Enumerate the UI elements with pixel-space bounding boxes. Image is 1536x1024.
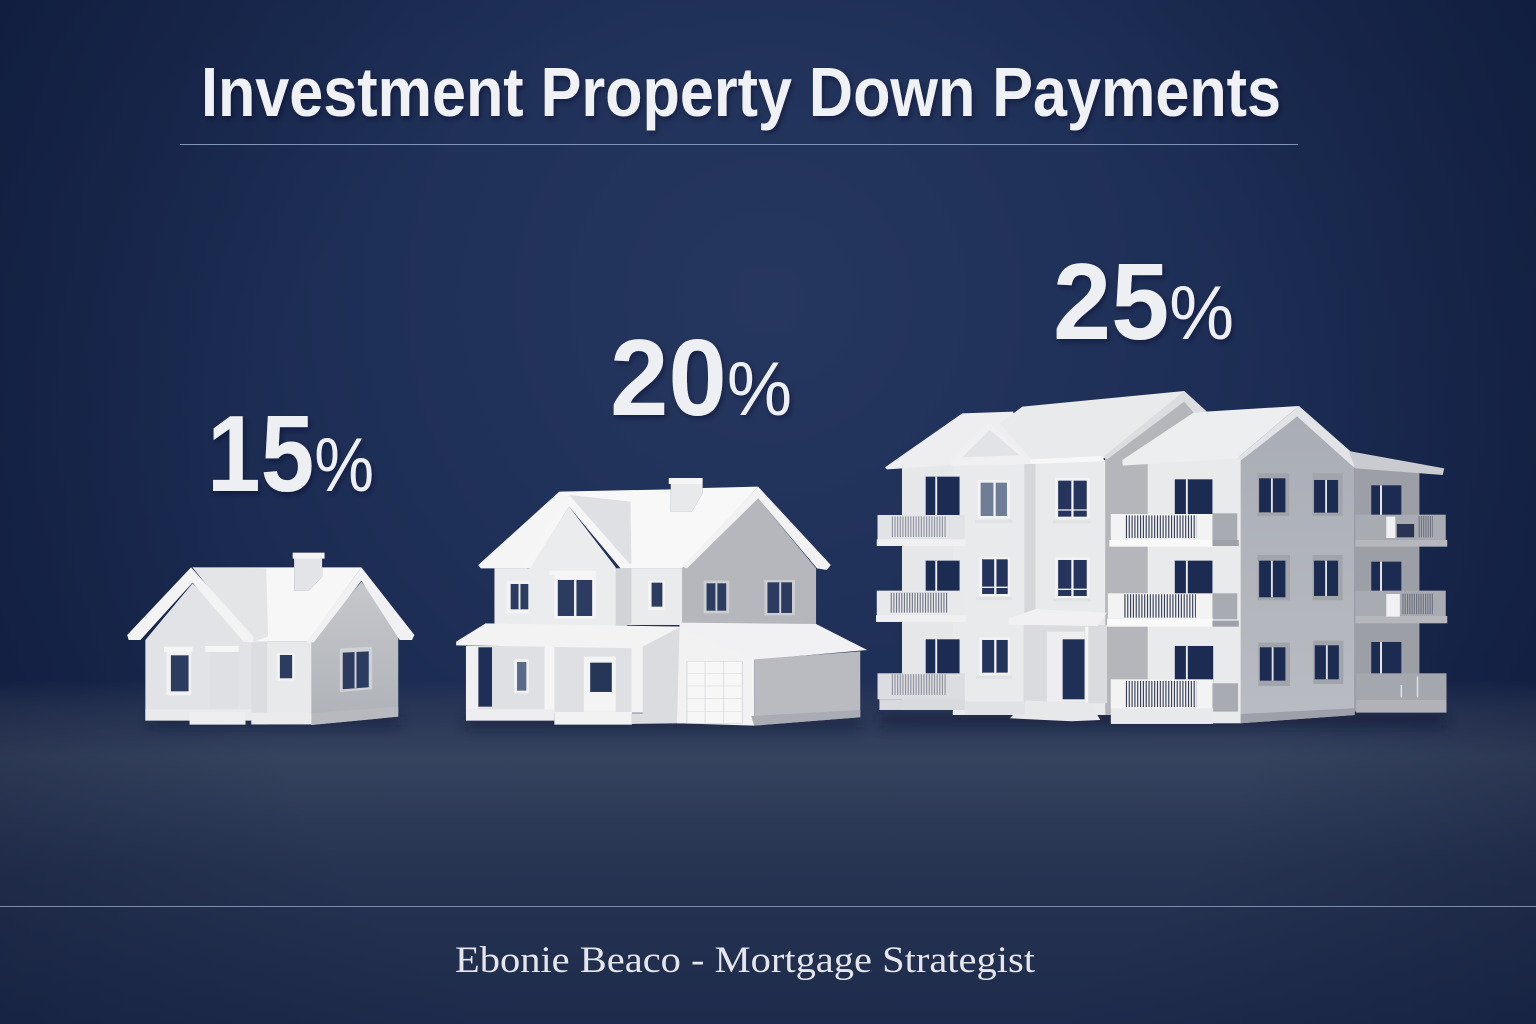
windows: left column doors bbox=[926, 477, 1401, 683]
balconies: centre bbox=[1107, 513, 1239, 724]
title: Investment Property Down Payments bbox=[201, 53, 1281, 131]
icon: two-storey house bbox=[456, 478, 867, 726]
windows: side wall bbox=[1258, 473, 1343, 686]
author credit: Ebonie Beaco - Mortgage Strategist bbox=[455, 940, 1036, 981]
chimney bbox=[293, 553, 325, 591]
entry canopy and door bbox=[1008, 609, 1107, 721]
garage bbox=[677, 623, 867, 726]
percentage: 20%: 20% bbox=[610, 317, 792, 439]
base plinth bbox=[965, 702, 1355, 723]
percentage: 25%: 25% bbox=[1053, 241, 1234, 363]
balconies: far right bbox=[1355, 515, 1447, 713]
icon: small house bbox=[127, 553, 414, 725]
porch bbox=[456, 623, 684, 725]
icon: apartment building bbox=[876, 391, 1447, 724]
ground shadows bbox=[150, 714, 1445, 728]
building walls bbox=[902, 417, 1419, 723]
balconies: left bbox=[876, 515, 966, 710]
percentage: 15%: 15% bbox=[207, 393, 374, 515]
windows: front column bbox=[975, 478, 1091, 677]
roofs bbox=[885, 391, 1444, 475]
chimney bbox=[669, 478, 703, 512]
